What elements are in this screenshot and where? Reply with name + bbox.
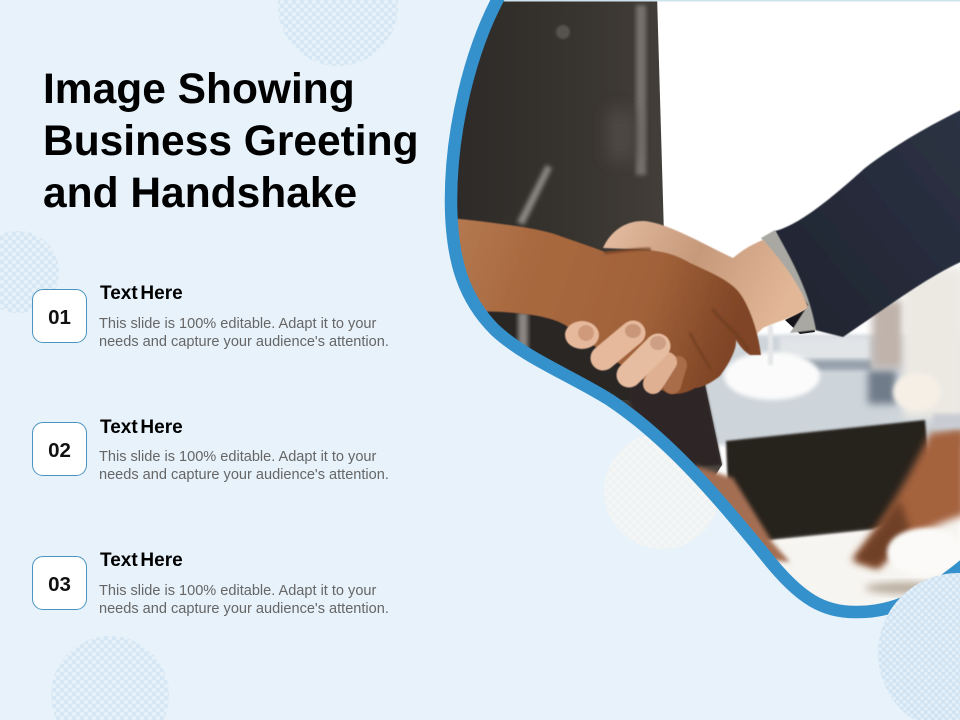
- blue curved frame: [451, 0, 960, 612]
- title: and Handshake: [43, 170, 357, 217]
- item 01: [32, 283, 389, 350]
- left person: knuckle creases: [605, 249, 748, 368]
- title: Business Greeting: [43, 118, 419, 165]
- background: desk and table: [700, 268, 960, 620]
- item 03: [32, 550, 389, 617]
- item 03 heading: Text Here: [100, 550, 183, 571]
- number badge 03: [32, 556, 87, 610]
- handshake photo in curved frame: [440, 0, 960, 620]
- left person: arm and hand: [450, 218, 761, 394]
- number badge 02: [32, 422, 87, 476]
- right person: wrist and thumb: [603, 221, 808, 345]
- number badge 03: 03: [48, 573, 71, 596]
- decorative dotted circle: top: [278, 0, 398, 66]
- item 01 description: needs and capture your audience's attention.: [99, 334, 389, 350]
- item 01 description: This slide is 100% editable. Adapt it to your: [99, 316, 376, 332]
- title: Image Showing: [43, 66, 355, 113]
- right person: navy sleeve: [775, 108, 960, 337]
- decorative dotted circle: centre: [604, 433, 720, 549]
- item 03 description: needs and capture your audience's attention.: [99, 601, 389, 617]
- item 02 description: This slide is 100% editable. Adapt it to your: [99, 449, 376, 465]
- number badge 01: [32, 289, 87, 343]
- item 03 description: [99, 583, 389, 617]
- background person: suit: [457, 2, 724, 476]
- item 02 heading: Text Here: [100, 417, 183, 438]
- background person: hands on desk: [693, 414, 960, 576]
- item 02: [32, 417, 389, 483]
- decorative dotted circle: left: [0, 231, 59, 313]
- right person: fingers under grip: [565, 321, 678, 385]
- decorative dotted circle: bottom left: [51, 636, 169, 720]
- title: [43, 66, 419, 217]
- item 03 description: This slide is 100% editable. Adapt it to your: [99, 583, 376, 599]
- item 02 description: needs and capture your audience's attention.: [99, 467, 389, 483]
- number badge 02: 02: [48, 439, 71, 462]
- decorative dotted circle: bottom right: [878, 573, 960, 720]
- number badge 01: 01: [48, 306, 71, 329]
- item 01 description: [99, 316, 389, 350]
- right person: cuff: [761, 230, 816, 333]
- right person: shirt shadow under cuff: [785, 308, 815, 334]
- item 01 heading: Text Here: [100, 283, 183, 304]
- top light edge of photo: [504, 0, 960, 2]
- item 02 description: [99, 449, 389, 483]
